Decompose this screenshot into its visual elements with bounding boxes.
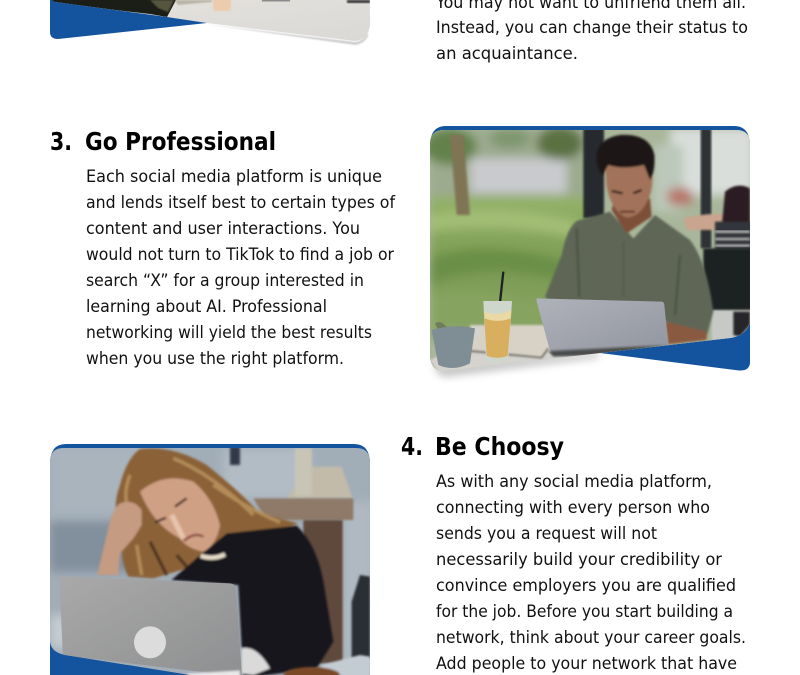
background scene (430, 130, 750, 372)
text: step 2 ending (435, 0, 748, 63)
text: step 4 body: network, think about your career goals. (436, 628, 746, 647)
text: step 4 body: As with any social media platform, (436, 472, 712, 491)
photo panel: stressed woman at laptop (40, 435, 373, 675)
laptop with logo (59, 576, 242, 675)
text: step 4 body: Add people to your network that have (436, 654, 737, 673)
text: step 3 body: would not turn to TikTok to find a job or (86, 245, 394, 264)
glass of juice (483, 272, 512, 362)
text: step 4 body: for the job. Before you start building a (436, 602, 733, 621)
text: step 4 body: convince employers you are qualified (436, 576, 736, 595)
background scene (40, 435, 373, 675)
photo panel: man working on laptop (420, 125, 753, 385)
text: step 4 body: sends you a request will not (436, 524, 657, 543)
text: step 4 body: connecting with every person who (436, 498, 710, 517)
man figure (545, 135, 713, 344)
text: step 2 ending: an acquaintance. (436, 44, 578, 63)
text: step 3 body: learning about AI. Professional (86, 297, 327, 316)
cup with plant (432, 322, 475, 368)
text: step 3 body: search “X” for a group interested in (86, 271, 364, 290)
text: step 2 ending: Instead, you can change their status to (436, 18, 748, 37)
top photo fragment (50, 0, 370, 45)
heading: step 4: 4. (401, 432, 423, 461)
text: step 4 body (436, 472, 746, 673)
table and notebook (430, 324, 586, 371)
woman figure (97, 448, 333, 675)
blue frame (50, 444, 370, 675)
text: step 3 body: Each social media platform is unique (86, 167, 382, 186)
heading: step 3: 3. (50, 127, 72, 156)
text: step 3 body: when you use the right platform. (86, 349, 344, 368)
text: step 3 body: content and user interactions. You (86, 219, 360, 238)
heading: step 4: Be Choosy (435, 432, 564, 461)
heading: step 3: Go Professional (85, 127, 276, 156)
text: step 4 body: necessarily build your credibility or (436, 550, 722, 569)
text: step 3 body: networking will yield the best results (86, 323, 372, 342)
laptop (537, 298, 668, 352)
desk items (187, 655, 370, 675)
blue accent (50, 0, 207, 39)
blue frame (430, 126, 750, 371)
text: step 3 body (86, 167, 396, 368)
text: step 3 body: and lends itself best to certain types of (86, 193, 396, 212)
